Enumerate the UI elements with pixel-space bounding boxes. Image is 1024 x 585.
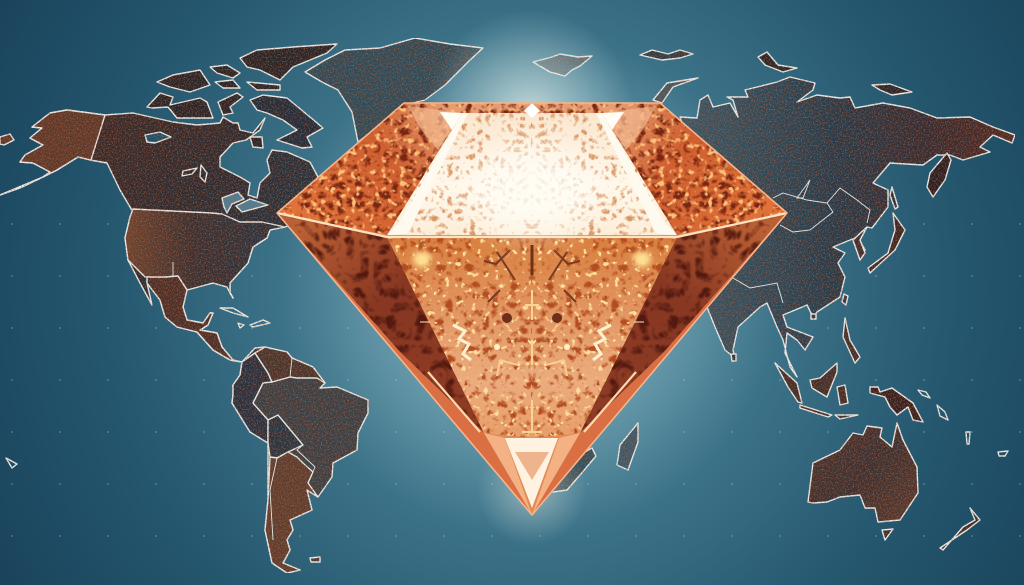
Pacific islands xyxy=(0,134,1008,468)
culet inner texture xyxy=(515,452,549,480)
Arctic islands xyxy=(145,44,337,213)
small Asian islands xyxy=(731,294,848,361)
glow below diamond xyxy=(477,435,587,545)
Caribbean islands xyxy=(220,308,270,328)
United States xyxy=(125,209,285,298)
Australia xyxy=(808,423,918,522)
centre axis motif xyxy=(522,245,542,432)
southern Africa xyxy=(535,448,596,492)
Korea xyxy=(853,227,867,260)
Franz Josef Land xyxy=(758,52,797,72)
Alaska xyxy=(0,110,105,195)
Colombia and Peru xyxy=(232,353,272,443)
diamond base fill xyxy=(277,103,787,515)
Madagascar xyxy=(617,423,638,470)
Tasmania xyxy=(882,529,893,540)
culet bright facet xyxy=(505,438,558,508)
Bolivia xyxy=(268,415,303,458)
top star xyxy=(524,103,540,118)
Argentina and Chile xyxy=(265,452,318,573)
country border lines xyxy=(173,180,870,540)
table center glow xyxy=(472,148,592,232)
glow above diamond xyxy=(425,10,635,220)
South America xyxy=(232,347,368,573)
diamond xyxy=(277,103,787,515)
diamond outline xyxy=(277,103,787,515)
Novaya Zemlya xyxy=(653,78,698,103)
Greenland xyxy=(305,38,483,142)
Mexico and Central America xyxy=(147,276,242,362)
New Zealand xyxy=(940,508,980,550)
right half facets mirrored xyxy=(531,103,787,515)
Kamchatka xyxy=(927,153,951,197)
background dot grid xyxy=(0,190,1024,585)
North America xyxy=(0,110,330,362)
New Siberian Islands xyxy=(872,84,912,95)
Southeast Asia islands xyxy=(775,318,948,422)
left half facets xyxy=(277,103,533,515)
Iceland xyxy=(533,54,592,76)
Venezuela and Guianas xyxy=(255,347,325,383)
Svalbard xyxy=(640,50,693,60)
Eurasia xyxy=(680,77,1015,377)
Japan xyxy=(868,213,905,273)
Sakhalin xyxy=(890,187,898,209)
Falkland xyxy=(310,557,320,562)
